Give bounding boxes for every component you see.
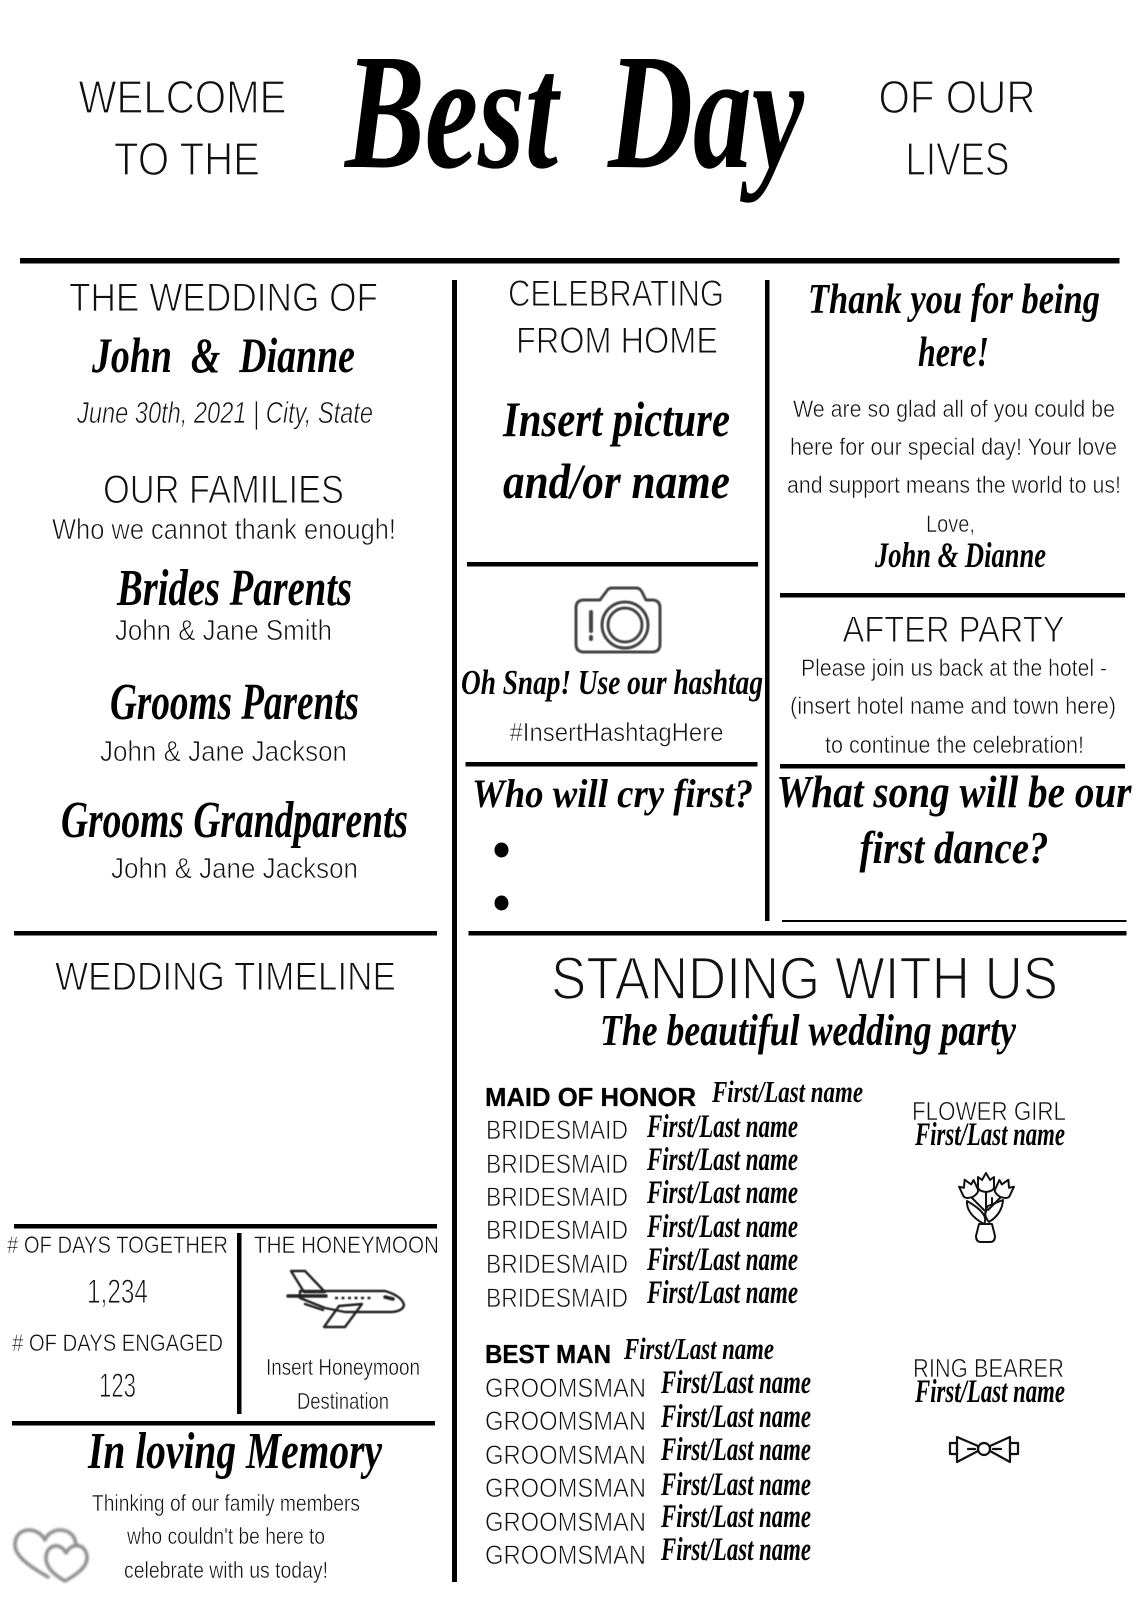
panel: thank you <box>787 277 1121 575</box>
grooms grandparents <box>61 792 408 885</box>
couple names: John & Dianne <box>91 327 355 383</box>
hashtag text: #InsertHashtagHere <box>510 717 724 747</box>
panel: the honeymoon <box>254 1232 439 1414</box>
groomsmen list: First/Last name <box>660 1432 811 1468</box>
panel: the wedding of <box>69 276 378 430</box>
honeymoon destination: Destination <box>297 1388 389 1414</box>
signature: John & Dianne <box>874 535 1046 575</box>
bridesmaids list <box>486 1109 798 1313</box>
honeymoon destination: Insert Honeymoon <box>266 1354 420 1380</box>
heading: in loving memory: In loving Memory <box>87 1423 383 1480</box>
title: best day script: Day <box>607 20 805 203</box>
heading: wedding timeline: WEDDING TIMELINE <box>55 955 396 999</box>
heading: thank you for being here: here! <box>918 330 989 376</box>
brides parents <box>115 560 352 647</box>
flower girl: First/Last name <box>914 1117 1065 1153</box>
panel: first dance song <box>776 766 1132 873</box>
title: welcome to the <box>78 71 286 185</box>
panel: in loving memory <box>15 1423 383 1583</box>
maid of honor: MAID OF HONOR <box>485 1082 696 1112</box>
icon: camera <box>576 588 660 652</box>
icon: hearts <box>15 1530 87 1581</box>
groomsmen list <box>485 1365 811 1570</box>
title: of our lives <box>878 71 1036 185</box>
panel: hashtag <box>461 588 763 747</box>
ring bearer: First/Last name <box>914 1374 1065 1410</box>
best man <box>485 1331 774 1369</box>
title: best day script: Best <box>344 20 561 203</box>
bridesmaids list: First/Last name <box>646 1142 798 1178</box>
days engaged: # OF DAYS ENGAGED <box>12 1330 223 1357</box>
thank you message: Love, <box>926 511 975 538</box>
flower girl: FLOWER GIRL <box>912 1096 1066 1126</box>
heading: celebrating from home: FROM HOME <box>516 320 718 361</box>
heading: thank you for being here <box>808 277 1100 376</box>
question: who will cry first: Who will cry first? <box>472 771 753 816</box>
memory text: Thinking of our family members <box>92 1490 360 1516</box>
bridesmaids list: BRIDESMAID <box>486 1149 628 1179</box>
subheading: wedding party: The beautiful wedding party <box>600 1006 1016 1055</box>
bridesmaids list: First/Last name <box>646 1175 798 1211</box>
memory text: celebrate with us today! <box>124 1557 328 1583</box>
groomsmen list: GROOMSMAN <box>485 1507 646 1537</box>
insert picture placeholder: and/or name <box>503 453 730 509</box>
heading: the wedding of: THE WEDDING OF <box>69 276 378 320</box>
bridesmaids list: BRIDESMAID <box>486 1182 628 1212</box>
panel: who will cry first <box>472 771 753 910</box>
title: welcome to the: WELCOME <box>78 71 286 123</box>
families subheading: Who we cannot thank enough! <box>52 514 396 546</box>
groomsmen list: GROOMSMAN <box>485 1440 646 1470</box>
heading: our families: OUR FAMILIES <box>103 468 344 512</box>
heading: celebrating from home <box>508 273 724 361</box>
heading: celebrating from home: CELEBRATING <box>508 273 724 314</box>
ring bearer: RING BEARER <box>913 1353 1064 1383</box>
after party text: Please join us back at the hotel - <box>801 655 1107 682</box>
bridesmaids list: First/Last name <box>646 1242 798 1278</box>
groomsmen list: GROOMSMAN <box>485 1473 646 1503</box>
bridesmaids list: BRIDESMAID <box>486 1115 628 1145</box>
groomsmen list: GROOMSMAN <box>485 1540 646 1570</box>
title: of our lives: OF OUR <box>878 71 1036 123</box>
memory text: who couldn't be here to <box>126 1523 325 1549</box>
days engaged <box>12 1330 223 1405</box>
flower girl <box>912 1096 1066 1242</box>
days together: # OF DAYS TOGETHER <box>7 1232 228 1259</box>
insert picture placeholder: Insert picture <box>502 391 730 447</box>
grooms parents: Grooms Parents <box>110 674 359 731</box>
groomsmen list: First/Last name <box>660 1467 811 1503</box>
grooms grandparents: Grooms Grandparents <box>61 792 408 849</box>
after party text: (insert hotel name and town here) <box>790 693 1116 720</box>
icon: bouquet <box>957 1173 1016 1242</box>
panel: standing with us <box>485 945 1066 1570</box>
title: best day script <box>344 20 805 203</box>
insert picture placeholder <box>502 391 730 509</box>
icon: bow tie <box>950 1437 1018 1462</box>
groomsmen list: First/Last name <box>660 1499 811 1535</box>
bridesmaids list: First/Last name <box>646 1275 798 1311</box>
grooms parents <box>100 674 359 768</box>
days engaged: 123 <box>99 1367 136 1405</box>
heading: after party: AFTER PARTY <box>842 609 1064 650</box>
honeymoon destination <box>266 1354 420 1414</box>
panel: our families <box>52 468 408 885</box>
hashtag heading: Oh Snap! Use our hashtag <box>461 663 763 702</box>
title banner <box>78 20 1036 203</box>
days together: 1,234 <box>87 1273 148 1311</box>
groomsmen list: First/Last name <box>660 1532 811 1568</box>
bullet answers <box>494 842 508 910</box>
days together <box>7 1232 228 1311</box>
memory text <box>92 1490 360 1583</box>
thank you message <box>787 396 1121 538</box>
maid of honor <box>485 1074 863 1112</box>
groomsmen list: First/Last name <box>660 1399 811 1435</box>
bridesmaids list: First/Last name <box>646 1109 798 1145</box>
panel: days counters <box>7 1232 228 1405</box>
brides parents: John & Jane Smith <box>115 615 332 647</box>
panel: celebrating from home <box>502 273 730 509</box>
ring bearer <box>913 1353 1065 1462</box>
brides parents: Brides Parents <box>116 560 352 617</box>
after party text <box>790 655 1116 759</box>
title: of our lives: LIVES <box>906 133 1010 185</box>
bridesmaids list: First/Last name <box>646 1209 798 1245</box>
best man: First/Last name <box>623 1331 774 1366</box>
title: welcome to the: TO THE <box>114 133 260 185</box>
date and place: June 30th, 2021 | City, State <box>76 395 373 430</box>
grooms parents: John & Jane Jackson <box>100 736 347 768</box>
after party text: to continue the celebration! <box>825 732 1084 759</box>
maid of honor: First/Last name <box>711 1074 863 1109</box>
grooms grandparents: John & Jane Jackson <box>111 853 358 885</box>
groomsmen list: GROOMSMAN <box>485 1406 646 1436</box>
groomsmen list: GROOMSMAN <box>485 1373 646 1403</box>
heading: the honeymoon: THE HONEYMOON <box>254 1232 439 1259</box>
heading: standing with us: STANDING WITH US <box>551 945 1058 1012</box>
question second line: first dance? <box>860 822 1048 873</box>
bridesmaids list: BRIDESMAID <box>486 1215 628 1245</box>
icon: airplane <box>288 1271 404 1327</box>
bridesmaids list: BRIDESMAID <box>486 1249 628 1279</box>
groomsmen list: First/Last name <box>660 1365 811 1401</box>
panel: after party <box>790 609 1116 759</box>
best man: BEST MAN <box>485 1339 611 1369</box>
bridesmaids list: BRIDESMAID <box>486 1283 628 1313</box>
